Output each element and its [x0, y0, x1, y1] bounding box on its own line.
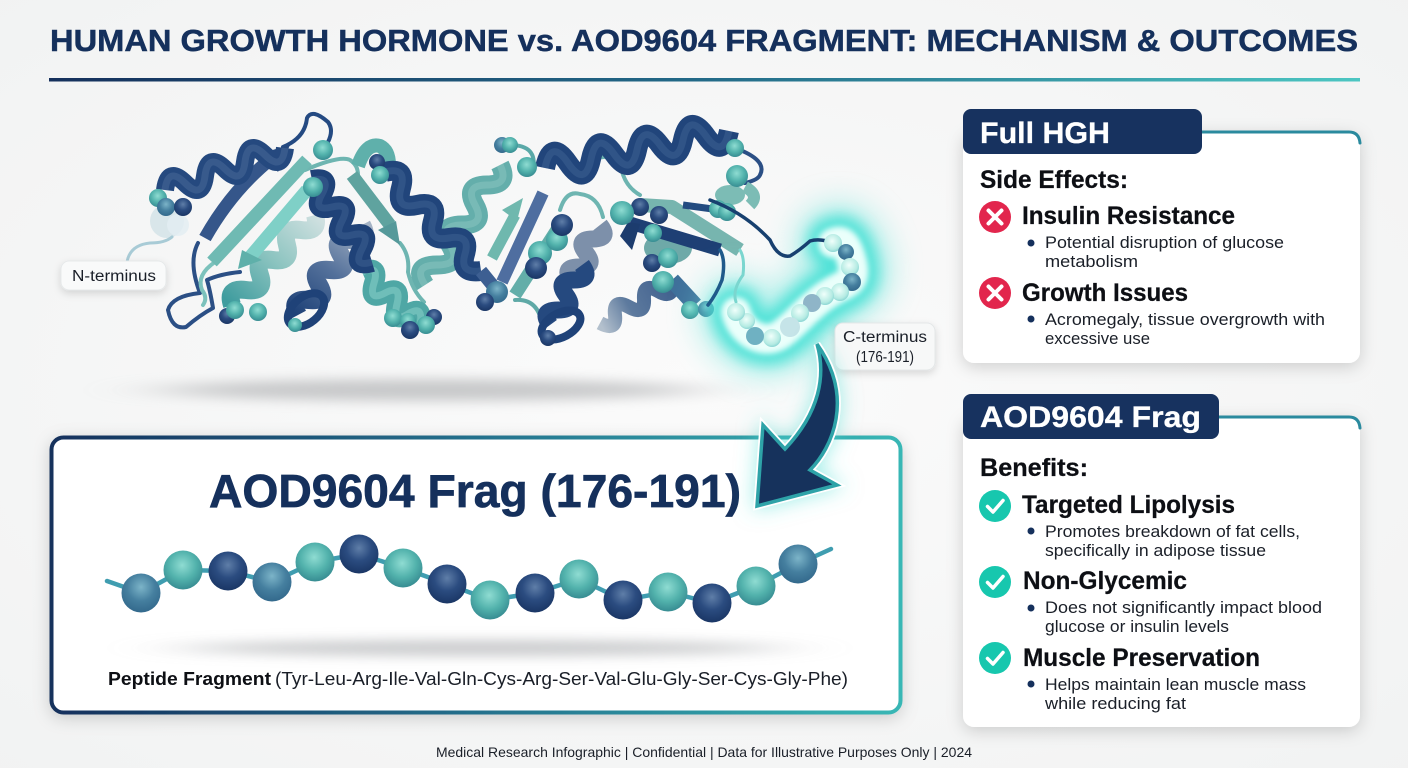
side effect: growth issues: excessive use — [1045, 329, 1150, 348]
panel: AOD9604 Frag — [963, 394, 1360, 727]
side effect: growth issues: Acromegaly, tissue overgrowth with — [1045, 310, 1325, 329]
peptide bead chain — [107, 534, 831, 622]
benefit: muscle preservation: while reducing fat — [1044, 694, 1186, 713]
side effect: growth issues — [979, 277, 1325, 348]
side-chain spheres — [149, 137, 748, 339]
side effect: insulin resistance: Insulin Resistance — [1022, 202, 1235, 230]
C-terminus label: (176-191) — [856, 349, 914, 366]
lower coil, right lobe — [537, 265, 695, 346]
subheading: Benefits: — [980, 454, 1088, 482]
heading tab: AOD9604 Frag — [980, 401, 1201, 434]
footer: Medical Research Infographic | Confidential | Data for Illustrative Purposes Only | 2024 — [436, 744, 972, 760]
benefit: targeted lipolysis: Promotes breakdown of fat cells, — [1045, 522, 1300, 541]
alpha helix 2 — [312, 179, 421, 325]
back helices, left lobe — [231, 165, 503, 333]
benefit: non-glycemic — [979, 566, 1322, 636]
chain shadow — [180, 640, 780, 656]
beta strands, left lobe — [205, 145, 400, 269]
top long helix — [545, 125, 729, 175]
side effect: insulin resistance — [979, 201, 1284, 271]
benefit: muscle preservation: Helps maintain lean muscle mass — [1045, 675, 1306, 694]
benefit: muscle preservation: Muscle Preservation — [1023, 644, 1260, 672]
benefit: targeted lipolysis: specifically in adipose tissue — [1045, 541, 1266, 560]
alpha helix 1 — [165, 148, 285, 190]
C-terminus label: C-terminus — [843, 329, 927, 346]
subheading: Side Effects: — [980, 166, 1128, 194]
thin connecting loops — [168, 114, 762, 330]
C-terminus glowing fragment — [708, 200, 861, 347]
benefit: non-glycemic: Does not significantly impact blood — [1045, 598, 1322, 617]
protein ground shadow — [160, 379, 700, 401]
right lobe, back elements — [515, 185, 754, 326]
side effect: growth issues: Growth Issues — [1022, 279, 1188, 307]
C-terminus label — [835, 323, 935, 370]
right lobe, strands — [492, 193, 735, 282]
benefit: non-glycemic: glucose or insulin levels — [1045, 617, 1229, 636]
protein ribbon structure — [149, 114, 762, 346]
side effect: insulin resistance: metabolism — [1045, 252, 1138, 271]
panel heading: AOD9604 Frag (176-191) — [209, 465, 741, 517]
peptide panel — [52, 438, 900, 712]
N-terminus label: N-terminus — [72, 268, 156, 285]
side effect: insulin resistance: Potential disruption of glucose — [1045, 233, 1284, 252]
benefit: targeted lipolysis: Targeted Lipolysis — [1022, 491, 1235, 519]
arrow: fragment to panel — [757, 344, 837, 506]
alpha helix 3 — [358, 145, 498, 292]
title: HUMAN GROWTH HORMONE vs. AOD9604 FRAGMENT: MECHANISM & OUTCOMES — [50, 23, 1358, 58]
peptide caption: Peptide Fragment — [108, 669, 271, 689]
peptide caption: (Tyr-Leu-Arg-Ile-Val-Gln-Cys-Arg-Ser-Val-Glu-Gly-Ser-Cys-Gly-Phe) — [275, 669, 848, 689]
panel: Full HGH — [963, 109, 1360, 363]
benefit: muscle preservation — [979, 642, 1306, 713]
heading tab — [963, 109, 1202, 154]
N-terminus label — [61, 237, 172, 290]
heading tab: Full HGH — [980, 117, 1110, 150]
benefit: non-glycemic: Non-Glycemic — [1023, 567, 1187, 595]
benefit: targeted lipolysis — [979, 490, 1300, 560]
heading tab — [963, 394, 1219, 439]
